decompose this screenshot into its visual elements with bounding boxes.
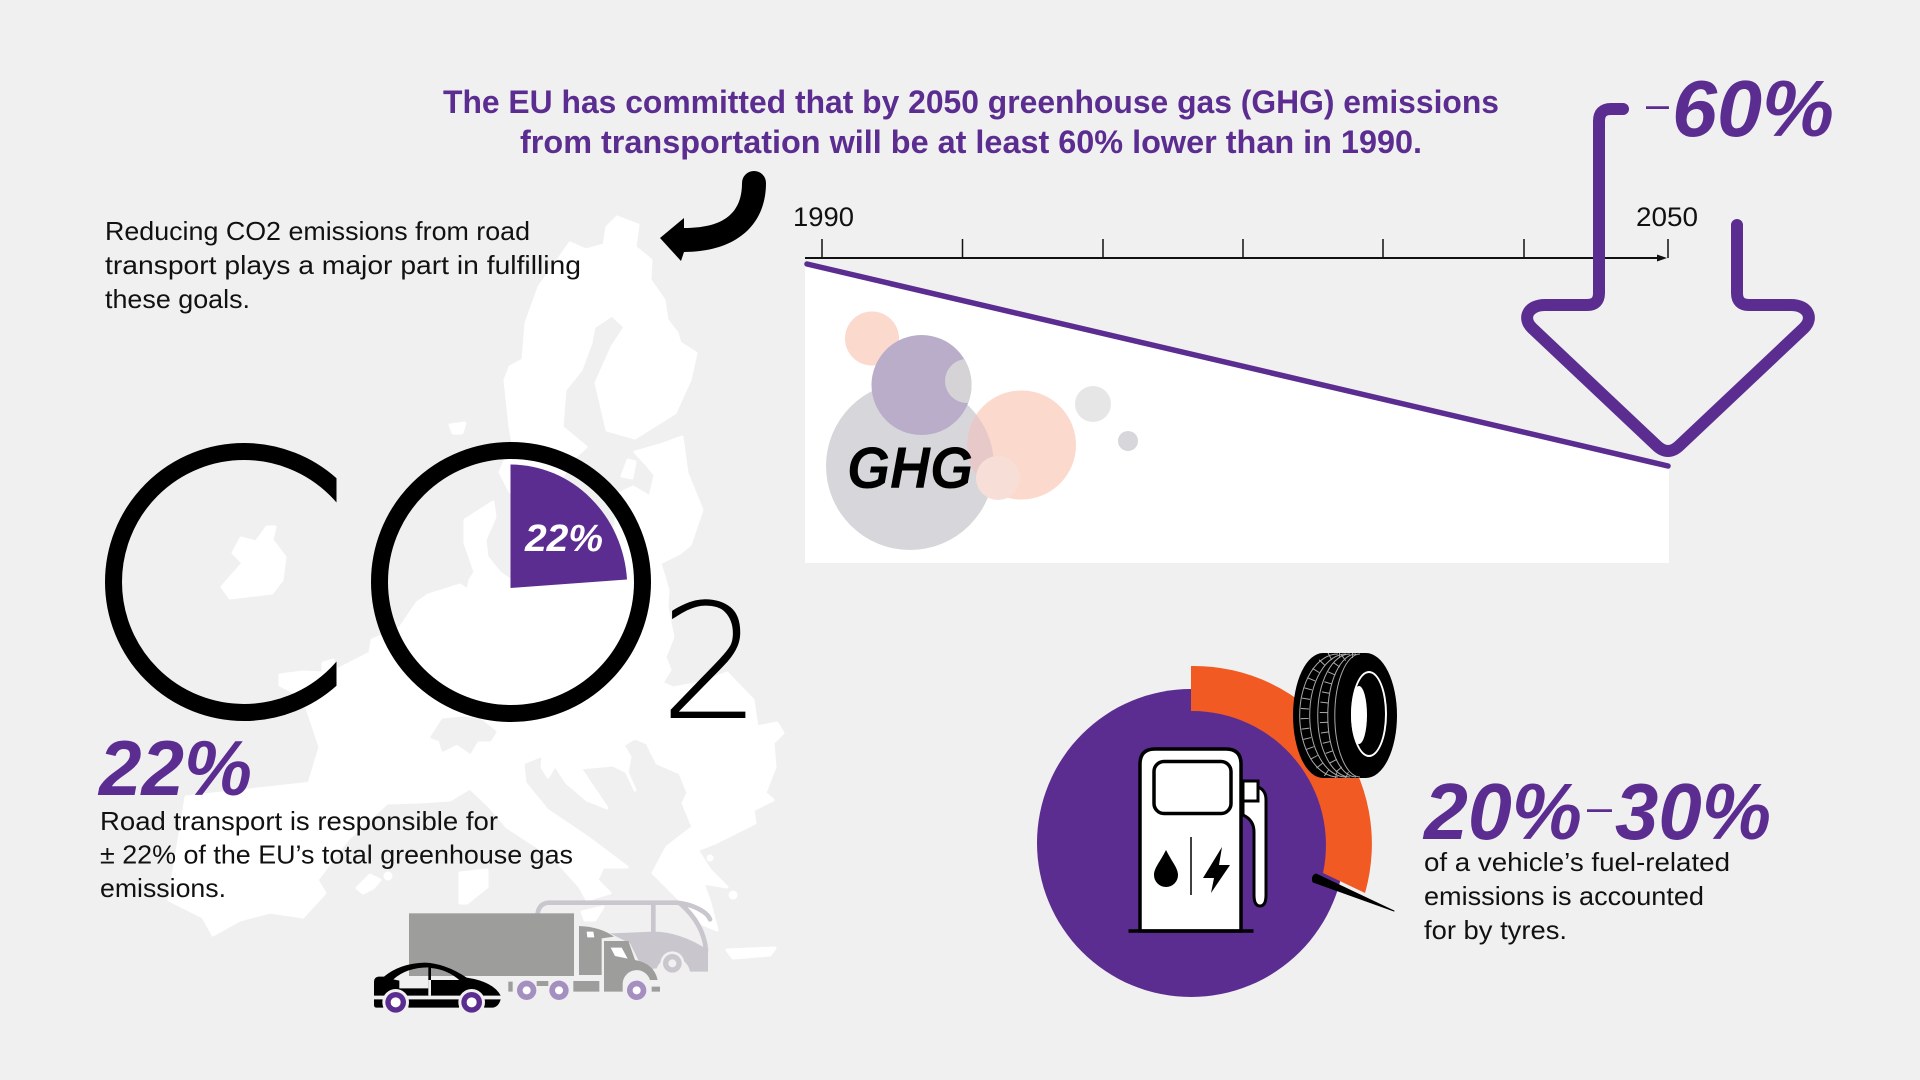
icon: car (374, 963, 501, 1016)
tyres text block (1424, 847, 1730, 945)
intro text block: transport plays a major part in fulfilling (105, 250, 581, 280)
pie slice 22 percent (510, 464, 627, 588)
pie label: 22% (524, 518, 603, 560)
icon: bus (538, 903, 710, 975)
road transport text block (100, 806, 573, 903)
tyres text block: of a vehicle’s fuel-related (1424, 847, 1730, 877)
road transport text block: Road transport is responsible for (100, 806, 498, 836)
letter C ring (114, 452, 374, 712)
arrow: big purple outline down arrow (1527, 109, 1809, 451)
fuel pump and tyre graphic (1037, 653, 1397, 997)
purple disc (1037, 689, 1345, 997)
subscript 2: 2 (660, 569, 761, 756)
20 to 30 percent figure: – (1587, 784, 1612, 830)
timeline axis 1990 to 2050 (793, 202, 1698, 262)
GHG label: GHG (847, 436, 973, 501)
title: The EU has committed that by 2050 greenhouse gas (GHG) emissions (443, 84, 1499, 120)
needle (1312, 874, 1394, 911)
minus 60 percent figure: 60% (1672, 64, 1834, 153)
20 to 30 percent figure (1422, 767, 1771, 856)
icon: fuel pump (1128, 749, 1266, 931)
20 to 30 percent figure: 30% (1615, 767, 1771, 856)
road transport text block: ± 22% of the EU’s total greenhouse gas (100, 840, 573, 870)
arrow: curved black pointer (660, 171, 766, 261)
year label 1990: 1990 (793, 202, 854, 232)
title (443, 84, 1499, 160)
icon: tyre (1293, 653, 1397, 778)
title: from transportation will be at least 60% lower than in 1990. (520, 124, 1422, 160)
intro text block (105, 216, 581, 314)
icon: vehicles (374, 903, 710, 1016)
chart: white reduction wedge (805, 264, 1669, 563)
infographic canvas (98, 80, 1832, 1013)
declining emissions line (807, 264, 1668, 466)
tyres text block: for by tyres. (1424, 915, 1567, 945)
20 to 30 percent figure: 20% (1422, 767, 1582, 856)
minus 60 percent figure: – (1646, 81, 1669, 127)
orange tyre share arc (1191, 666, 1372, 893)
icon: truck (409, 913, 660, 1000)
road transport text block: emissions. (100, 873, 226, 903)
GHG bubbles (826, 312, 1138, 550)
year label 2050: 2050 (1636, 202, 1698, 232)
intro text block: Reducing CO2 emissions from road (105, 216, 530, 246)
tyres text block: emissions is accounted (1424, 881, 1704, 911)
map of Europe (169, 217, 783, 958)
letter O ring (380, 450, 642, 714)
CO2 graphic (114, 450, 761, 756)
intro text block: these goals. (105, 284, 250, 314)
22 percent figure: 22% (97, 724, 252, 812)
